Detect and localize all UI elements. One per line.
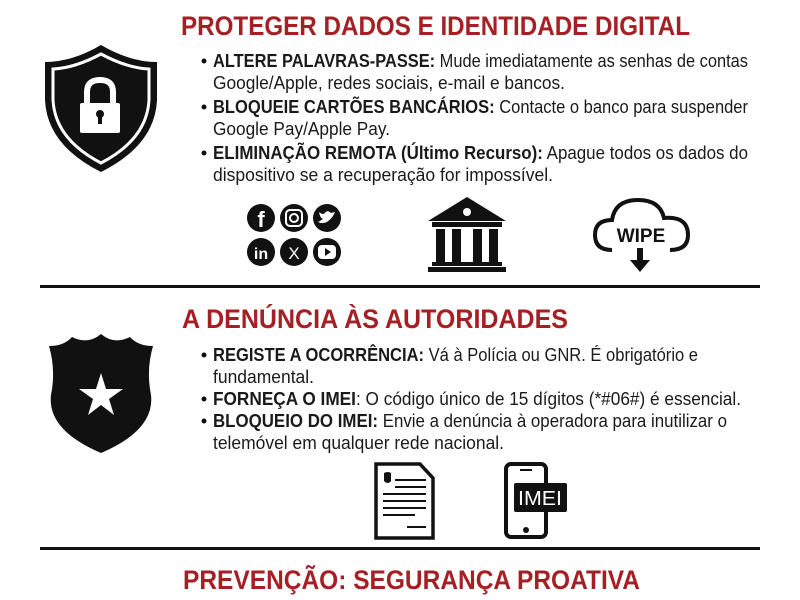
icon: social media grid: in — [254, 246, 268, 263]
bullets: denuncia: REGISTE A OCORRÊNCIA: Vá à Polícia ou GNR. É obrigatório e — [213, 344, 698, 365]
bullets: proteger dados: Google Pay/Apple Pay. — [213, 119, 390, 139]
icon: social media grid — [247, 204, 341, 266]
icon: social media grid: X — [288, 244, 300, 263]
bullets: proteger dados: ALTERE PALAVRAS-PASSE: Mude imediatamente as senhas de contas — [213, 51, 748, 71]
icon: police badge — [49, 334, 153, 453]
icon: shield with lock — [45, 45, 157, 172]
icon: cloud wipe — [595, 200, 688, 272]
bullets: denuncia: FORNEÇA O IMEI: O código único de 15 dígitos (*#06#) é essencial. — [213, 389, 741, 409]
icon: phone with IMEI — [506, 464, 567, 537]
icon: bank — [428, 197, 506, 272]
icon: phone with IMEI: IMEI — [518, 488, 562, 510]
title: denuncia: A DENÚNCIA ÀS AUTORIDADES — [182, 303, 568, 334]
bullets: proteger dados: dispositivo se a recuperação for impossível. — [213, 165, 553, 185]
bullets: proteger dados: Google/Apple, redes sociais, e-mail e bancos. — [213, 73, 565, 93]
bullets: proteger dados: BLOQUEIE CARTÕES BANCÁRIOS: Contacte o banco para suspender — [213, 96, 748, 117]
bullets: denuncia — [202, 344, 741, 453]
title: proteger dados: PROTEGER DADOS E IDENTIDADE DIGITAL — [181, 11, 690, 41]
bullets: proteger dados: ELIMINAÇÃO REMOTA (Último Recurso): Apague todos os dados do — [213, 142, 748, 163]
bullets: denuncia: telemóvel em qualquer rede nacional. — [213, 433, 504, 453]
bullets: denuncia: BLOQUEIO DO IMEI: Envie a denúncia à operadora para inutilizar o — [213, 411, 727, 431]
title: prevencao: PREVENÇÃO: SEGURANÇA PROATIVA — [183, 564, 640, 595]
bullets: proteger dados — [202, 51, 748, 185]
icon: social media grid: f — [257, 207, 265, 232]
icon: cloud wipe: WIPE — [617, 226, 665, 247]
icon: police report document — [376, 464, 433, 538]
bullets: denuncia: fundamental. — [213, 367, 314, 387]
